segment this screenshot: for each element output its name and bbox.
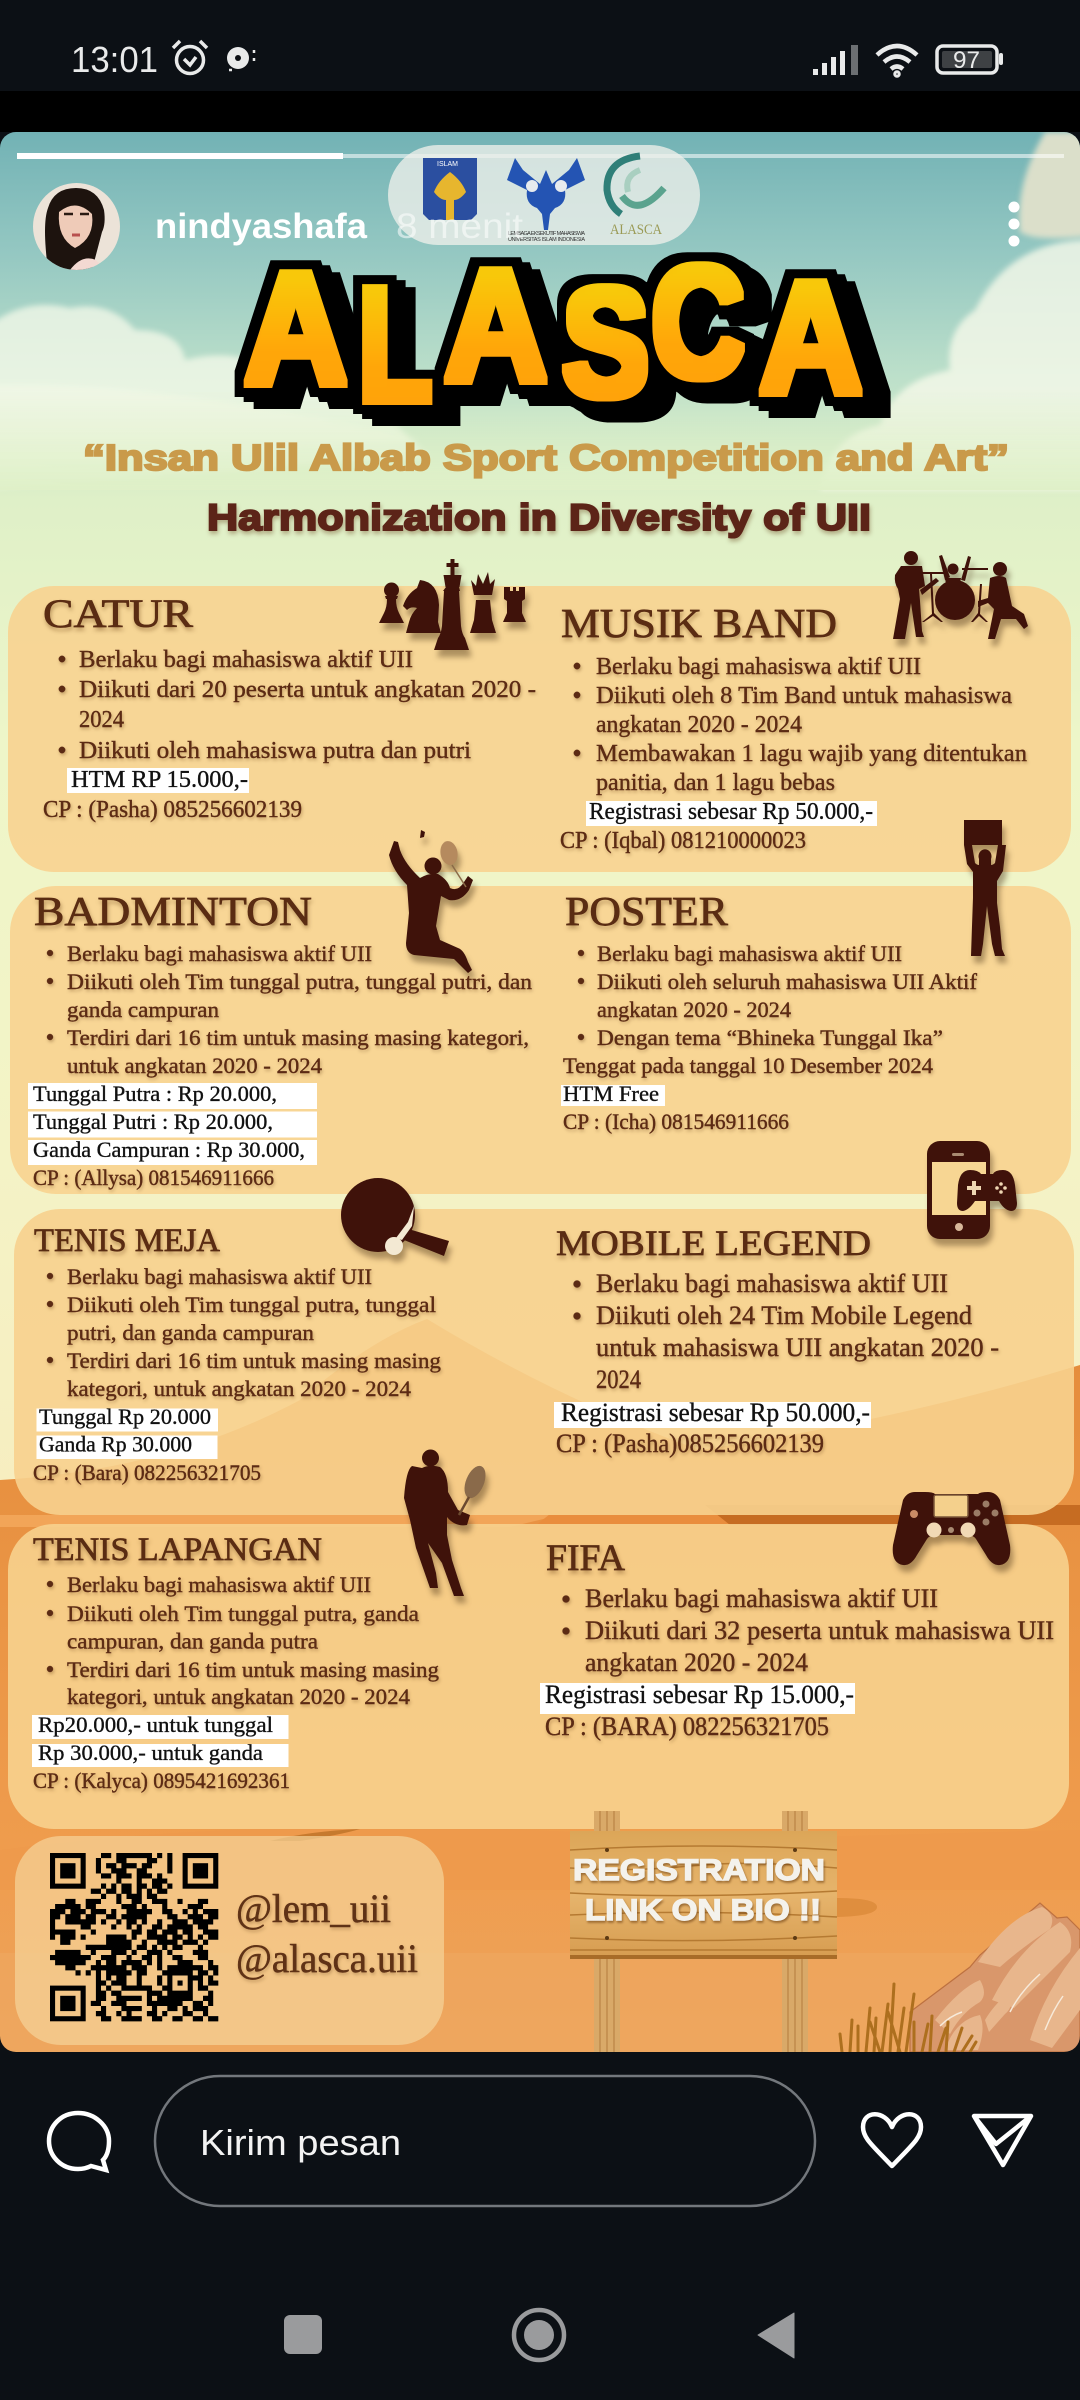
list: mobile legend rules: Diikuti oleh 24 Tim Mobile Legend [596,1301,972,1330]
deadline: poster: Tenggat pada tanggal 10 Desember 2024 [563,1053,933,1078]
list: fifa rules: Berlaku bagi mahasiswa aktif UII [585,1584,938,1613]
icon: phone with gamepad [927,1141,1017,1239]
panel: qr and social handles [15,1836,444,2045]
panel: tenis meja and mobile legend [14,1141,1074,1515]
title: A [444,236,547,416]
price tag: fifa: Registrasi sebesar Rp 15.000,- [545,1680,854,1709]
sign text: REGISTRATION [573,1854,825,1887]
sky background [0,132,1080,1532]
desert rock [910,1903,1080,2052]
price tag: catur: HTM RP 15.000,- [71,766,248,793]
list: catur rules [59,646,536,764]
android navigation bar [284,2310,794,2360]
contact: poster: CP : (Icha) 081546911666 [563,1109,789,1134]
title: A [759,248,862,428]
profile avatar [33,183,120,270]
list: musik band rules [574,653,1027,796]
price tags: tenis lapangan: Rp20.000,- untuk tunggal [38,1712,273,1737]
sky fade into horizon [0,390,1080,490]
panel: tenis lapangan and fifa [8,1450,1069,1829]
price tags: tenis meja [36,1404,218,1459]
list: tenis lapangan rules: Terdiri dari 16 tim untuk masing masing [67,1657,439,1682]
list: badminton rules: Berlaku bagi mahasiswa aktif UII [67,941,372,966]
nav: home [514,2310,564,2360]
list: badminton rules: Diikuti oleh Tim tunggal putra, tunggal putri, dan [67,969,532,994]
price tags: badminton [28,1081,317,1165]
list: mobile legend rules: Berlaku bagi mahasiswa aktif UII [596,1269,948,1298]
username: nindyashafa [155,207,368,246]
qr code [50,1856,218,2019]
price tag: poster: HTM Free [563,1081,659,1106]
list: musik band rules: panitia, dan 1 lagu bebas [596,769,835,796]
icon: chess pieces [379,559,526,650]
desert dunes [0,1319,1080,2052]
heading: tenis meja: TENIS MEJA [34,1223,220,1259]
heading: tenis lapangan: TENIS LAPANGAN [33,1532,322,1568]
contact: tenis meja: CP : (Bara) 082256321705 [33,1460,261,1485]
heading: fifa: FIFA [546,1538,625,1579]
black band above story [0,91,1080,132]
panel: badminton and poster [10,820,1071,1194]
contact: badminton: CP : (Allysa) 081546911666 [33,1165,274,1190]
list: tenis lapangan rules [47,1572,439,1709]
desert grass [840,1984,976,2052]
icon: person holding poster [964,820,1006,956]
list: poster rules: Diikuti oleh seluruh mahasiswa UII Aktif [597,969,978,994]
icon: heart [863,2114,921,2166]
logo pill [388,145,700,245]
icon: band silhouettes [893,551,1028,639]
message input: Kirim pesan [200,2122,401,2163]
list: tenis meja rules: kategori, untuk angkatan 2020 - 2024 [67,1376,411,1401]
panel: catur and musik band [8,551,1071,872]
list: mobile legend rules: untuk mahasiswa UII angkatan 2020 - [596,1333,999,1362]
price tags: tenis lapangan: Rp 30.000,- untuk ganda [38,1740,263,1765]
price tags: tenis meja: Ganda Rp 30.000 [39,1432,192,1456]
list: badminton rules [47,941,532,1078]
list: tenis meja rules: Diikuti oleh Tim tunggal putra, tunggal [67,1292,436,1317]
handle: lem uii: @lem_uii [236,1886,391,1931]
logo: university shield [423,158,477,220]
heading: catur: CATUR [43,591,193,636]
sign text [573,1854,825,1927]
icon: table tennis paddle [341,1178,449,1256]
title: L [358,252,432,436]
list: tenis meja rules: Berlaku bagi mahasiswa aktif UII [67,1264,372,1289]
contact: mobile legend: CP : (Pasha)085256602139 [556,1429,824,1458]
icon: tennis player [404,1450,490,1596]
title: C [651,232,745,411]
icon: send [974,2116,1031,2165]
logo: blue owl: UNIVERSITAS ISLAM INDONESIA [508,237,585,243]
heading: musik band: MUSIK BAND [561,600,837,646]
handle: alasca uii: @alasca.uii [236,1936,418,1981]
clock: 13:01 [71,39,158,80]
contact: tenis lapangan: CP : (Kalyca) 0895421692361 [33,1768,290,1793]
subtitle: Harmonization in Diversity of UII [207,497,871,538]
list: poster rules: Dengan tema “Bhineka Tunggal Ika” [597,1025,943,1050]
list: poster rules: angkatan 2020 - 2024 [597,997,791,1022]
title [244,232,862,436]
bottom message bar [49,2076,1031,2206]
list: fifa rules: Diikuti dari 32 peserta untuk mahasiswa UII [585,1616,1054,1645]
icon: comment bubble [49,2113,109,2170]
wooden registration sign [570,1811,837,2052]
logo: blue owl [507,158,585,243]
icon: alarm [173,41,207,74]
sign text: LINK ON BIO !! [585,1894,821,1927]
icon: wifi [877,46,917,76]
nav: back [758,2313,794,2358]
price tags: badminton: Tunggal Putra : Rp 20.000, [33,1081,277,1106]
list: poster rules [578,941,978,1050]
dune details [0,1505,1080,2053]
list: musik band rules: Diikuti oleh 8 Tim Band untuk mahasiswa [596,682,1012,709]
list: tenis lapangan rules: Berlaku bagi mahasiswa aktif UII [67,1572,371,1597]
status bar [71,39,1003,80]
list: catur rules: Berlaku bagi mahasiswa aktif UII [79,646,413,673]
list: tenis lapangan rules: kategori, untuk angkatan 2020 - 2024 [67,1684,410,1709]
title: S [562,255,649,430]
nav: recent apps [284,2315,322,2354]
price tags: tenis meja: Tunggal Rp 20.000 [39,1404,211,1429]
icon: battery [937,46,1003,74]
list: tenis meja rules [47,1264,441,1401]
tagline: “Insan Ulil Albab Sport Competition and Art” [83,437,1009,478]
icon: badminton player [389,830,473,973]
list: fifa rules: angkatan 2020 - 2024 [585,1648,808,1677]
price tag: mobile legend: Registrasi sebesar Rp 50.000,- [561,1398,870,1427]
icon: signal bars [813,45,858,75]
list: badminton rules: ganda campuran [67,997,219,1022]
contact: catur: CP : (Pasha) 085256602139 [43,796,302,823]
list: tenis lapangan rules: campuran, dan ganda putra [67,1628,318,1654]
icon: more menu [1008,202,1020,246]
logo: alasca hands: ALASCA [610,222,662,238]
heading: poster: POSTER [565,888,729,934]
list: musik band rules: angkatan 2020 - 2024 [596,711,802,738]
list: mobile legend rules [574,1269,999,1394]
icon: record disc [227,47,254,70]
heading: badminton: BADMINTON [34,888,312,934]
icon: battery: 97 [953,47,980,74]
list: catur rules: Diikuti oleh mahasiswa putra dan putri [79,737,471,764]
list: mobile legend rules: 2024 [596,1365,641,1394]
heading: mobile legend: MOBILE LEGEND [556,1223,871,1263]
logo: university shield: ISLAM [437,161,458,168]
logo: alasca hands [607,156,664,238]
price tags: badminton: Ganda Campuran : Rp 30.000, [33,1137,305,1162]
timestamp: 8 menit [396,207,523,246]
contact: fifa: CP : (BARA) 082256321705 [545,1712,829,1741]
icon: game controller [893,1492,1010,1565]
list: fifa rules [562,1584,1054,1677]
logo: blue owl: LEMBAGA EKSEKUTIF MAHASISWA [508,231,585,237]
clouds [0,132,1080,490]
list: catur rules: 2024 [79,706,124,733]
list: tenis lapangan rules: Diikuti oleh Tim tunggal putra, ganda [67,1601,419,1626]
story progress bar [17,153,1064,159]
list: musik band rules: Membawakan 1 lagu wajib yang ditentukan [596,740,1027,767]
price tag: musik band: Registrasi sebesar Rp 50.000,- [589,798,873,825]
contact: musik band: CP : (Iqbal) 081210000023 [560,827,806,854]
list: badminton rules: Terdiri dari 16 tim untuk masing masing kategori, [67,1025,529,1050]
list: musik band rules: Berlaku bagi mahasiswa aktif UII [596,653,921,680]
list: tenis meja rules: putri, dan ganda campuran [67,1320,314,1345]
list: catur rules: Diikuti dari 20 peserta untuk angkatan 2020 - [79,676,536,703]
message input [155,2076,815,2206]
list: badminton rules: untuk angkatan 2020 - 2024 [67,1053,322,1078]
list: tenis meja rules: Terdiri dari 16 tim untuk masing masing [67,1348,441,1373]
price tags: tenis lapangan [32,1712,288,1767]
list: poster rules: Berlaku bagi mahasiswa aktif UII [597,941,902,966]
title: A [244,239,347,419]
price tags: badminton: Tunggal Putri : Rp 20.000, [33,1109,273,1134]
